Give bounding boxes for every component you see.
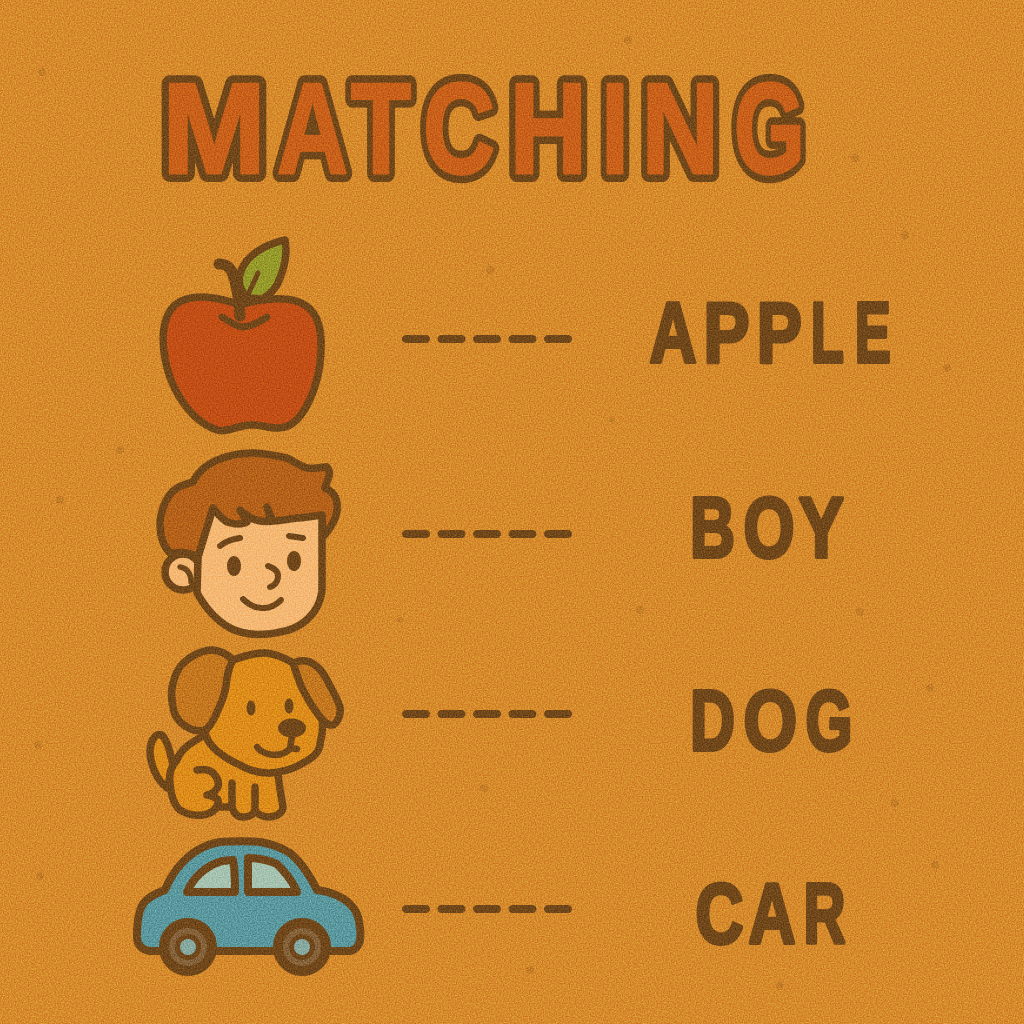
- title: T: [351, 57, 411, 201]
- label: APPLE: [650, 286, 891, 381]
- title: N: [642, 57, 719, 201]
- title: H: [510, 57, 587, 201]
- label: DOG: D: [690, 674, 735, 769]
- label: CAR: A: [748, 867, 796, 962]
- icon: apple: [163, 240, 321, 431]
- title: I: [601, 57, 629, 201]
- label: DOG: G: [806, 674, 852, 769]
- label: BOY: O: [744, 481, 794, 576]
- label: CAR: R: [804, 867, 846, 962]
- label: CAR: [696, 867, 846, 962]
- label: CAR: C: [696, 867, 744, 962]
- title: N: [642, 57, 719, 201]
- title: T: [351, 57, 411, 201]
- label: BOY: Y: [799, 481, 844, 576]
- title: C: [423, 57, 495, 201]
- title: H: [510, 57, 587, 201]
- label: APPLE: E: [855, 286, 891, 381]
- label: BOY: [690, 481, 844, 576]
- label: DOG: [690, 674, 852, 769]
- title: [162, 57, 805, 201]
- title: A: [277, 57, 348, 201]
- title: G: [734, 57, 805, 201]
- label: APPLE: P: [757, 286, 802, 381]
- icon: boy: [160, 453, 337, 634]
- title: M: [162, 57, 266, 201]
- label: DOG: O: [744, 674, 797, 769]
- label: APPLE: L: [811, 286, 844, 381]
- icon: dog: [150, 650, 340, 817]
- connector: apple: [406, 335, 571, 343]
- title: G: [734, 57, 805, 201]
- label: APPLE: A: [650, 286, 696, 381]
- connector: car: [406, 905, 571, 913]
- title: C: [423, 57, 495, 201]
- title: A: [277, 57, 348, 201]
- label: APPLE: P: [704, 286, 750, 381]
- icon: car: [137, 841, 360, 972]
- connector: dog: [406, 710, 571, 718]
- connector: boy: [406, 530, 571, 538]
- title: M: [162, 57, 266, 201]
- title: I: [601, 57, 629, 201]
- label: BOY: B: [690, 481, 735, 576]
